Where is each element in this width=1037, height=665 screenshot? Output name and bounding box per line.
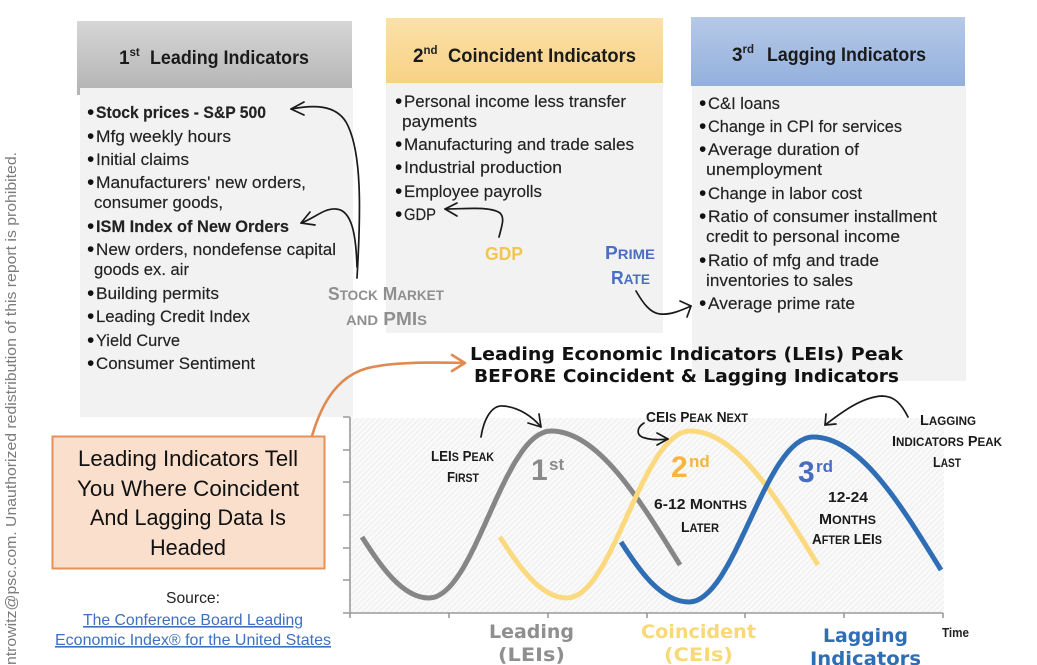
- arrow: stock market to S&P 500: [291, 102, 360, 278]
- list: lagging indicators: Change in labor cost: [708, 185, 862, 203]
- watermark: ntrowitz@psc.com. Unauthorized redistribution of this report is prohibited.: [4, 152, 20, 665]
- marker: 1st: 1: [531, 454, 548, 487]
- arrow: LEIs peak: [481, 406, 541, 437]
- chart title: [470, 345, 903, 387]
- list: lagging indicators: Average prime rate: [708, 295, 855, 313]
- list: leading indicators: Building permits: [96, 285, 219, 303]
- list: leading indicators: •: [87, 305, 94, 328]
- note: 6-12 months later: [654, 496, 747, 536]
- marker: 3rd: rd: [816, 457, 833, 476]
- list: leading indicators: New orders, nondefense capital: [96, 241, 336, 259]
- list: leading indicators: •: [87, 238, 94, 261]
- heading: lagging indicators: [691, 17, 965, 86]
- heading: lagging indicators: 3: [732, 45, 743, 66]
- note: LEIs peak first: FIRST: [447, 469, 480, 486]
- list: leading indicators: consumer goods,: [94, 194, 223, 212]
- marker: 1st: [531, 454, 564, 487]
- note: 6-12 months later: LATER: [681, 519, 719, 536]
- list: lagging indicators: [699, 92, 937, 315]
- chart title: Leading Economic Indicators (LEIs) Peak: [470, 345, 903, 365]
- list: lagging indicators: Ratio of mfg and trade: [708, 252, 879, 270]
- arrow: CEIs peak: [638, 423, 668, 445]
- list: coincident indicators: GDP: [404, 206, 436, 224]
- heading: coincident indicators: nd: [424, 45, 438, 57]
- callout: Leading Indicators Tell: [78, 446, 298, 471]
- marker: 3rd: 3: [798, 456, 815, 489]
- note: lagging indicators peak last: INDICATORS PEAK: [892, 433, 1002, 450]
- list: coincident indicators: payments: [402, 113, 477, 131]
- note: LEIs peak first: LEIS PEAK: [431, 448, 494, 465]
- axis label: coincident: [641, 621, 756, 665]
- list: leading indicators: Manufacturers' new orders,: [96, 174, 306, 192]
- label: prime rate: [605, 243, 655, 288]
- axis label: time: Time: [942, 626, 969, 640]
- note: 12-24 months after LEIs: 12-24: [828, 489, 869, 506]
- axis label: coincident: Coincident: [641, 621, 756, 643]
- axis label: lagging: Lagging: [823, 625, 908, 647]
- panel: lagging indicators: [691, 17, 966, 381]
- source: [55, 590, 331, 649]
- label: GDP: GDP: [485, 244, 523, 264]
- label: prime rate: PRIME: [605, 243, 655, 263]
- note: lagging indicators peak last: LAGGING: [920, 412, 976, 429]
- list: lagging indicators: •: [699, 205, 706, 228]
- list: leading indicators: Consumer Sentiment: [96, 355, 255, 373]
- note: 12-24 months after LEIs: AFTER LEIS: [812, 531, 882, 548]
- heading: leading indicators: 1: [119, 48, 130, 69]
- list: lagging indicators: •: [699, 249, 706, 272]
- note: LEIs peak first: [431, 448, 494, 486]
- note: 6-12 months later: 6-12 MONTHS: [654, 496, 747, 513]
- arrow: prime rate to list: [636, 291, 691, 317]
- heading: coincident indicators: [386, 18, 663, 83]
- list: leading indicators: •: [87, 125, 94, 148]
- list: leading indicators: •: [87, 171, 94, 194]
- panel: coincident indicators: [386, 18, 663, 333]
- list: leading indicators: [87, 101, 336, 375]
- axes: [343, 417, 943, 618]
- note: lagging indicators peak last: LAST: [933, 454, 962, 471]
- callout: [52, 436, 324, 568]
- label: stock market and PMIs: STOCK MARKET: [328, 284, 444, 304]
- list: leading indicators: •: [87, 215, 94, 238]
- list: lagging indicators: C&I loans: [708, 95, 780, 113]
- curve: coincident: [500, 431, 818, 598]
- list: leading indicators: •: [87, 101, 94, 124]
- note: lagging indicators peak last: [892, 412, 1002, 471]
- note: 12-24 months after LEIs: [812, 489, 882, 548]
- callout: Headed: [150, 535, 226, 560]
- list: leading indicators: Leading Credit Index: [96, 308, 251, 326]
- chart: indicator cycles: [343, 396, 1002, 665]
- heading: lagging indicators: Lagging Indicators: [767, 45, 926, 66]
- marker: 3rd: [798, 456, 833, 489]
- arrow: GDP to list: [445, 203, 503, 237]
- list: coincident indicators: •: [395, 90, 402, 113]
- marker: 2nd: [671, 451, 710, 484]
- chart title: BEFORE Coincident & Lagging Indicators: [474, 367, 899, 387]
- list: coincident indicators: Manufacturing and trade sales: [404, 136, 634, 154]
- heading: coincident indicators: 2: [413, 46, 424, 67]
- curve: lagging: [621, 437, 941, 602]
- source: Source:: [166, 590, 220, 607]
- marker: 2nd: 2: [671, 451, 688, 484]
- heading: coincident indicators: Coincident Indicators: [448, 46, 636, 67]
- arrow: lagging peak: [825, 396, 908, 425]
- heading: lagging indicators: rd: [742, 44, 754, 56]
- list: leading indicators: Initial claims: [96, 151, 189, 169]
- list: coincident indicators: Personal income less transfer: [404, 93, 627, 111]
- list: lagging indicators: unemployment: [706, 161, 822, 179]
- list: leading indicators: Mfg weekly hours: [96, 128, 231, 146]
- label: stock market and PMIs: AND PMIS: [346, 309, 427, 329]
- note: 12-24 months after LEIs: MONTHS: [819, 511, 876, 528]
- list: leading indicators: Yield Curve: [96, 332, 180, 350]
- heading: leading indicators: st: [130, 47, 140, 59]
- list: leading indicators: •: [87, 352, 94, 375]
- axis label: leading: Leading: [489, 621, 574, 643]
- list: lagging indicators: •: [699, 138, 706, 161]
- list: lagging indicators: •: [699, 92, 706, 115]
- list: lagging indicators: Ratio of consumer installment: [708, 208, 937, 226]
- callout: You Where Coincident: [77, 476, 300, 501]
- label: stock market and PMIs: [328, 284, 444, 329]
- panel: leading indicators: [77, 21, 353, 417]
- list: lagging indicators: Average duration of: [708, 141, 859, 159]
- list: lagging indicators: Change in CPI for services: [708, 118, 902, 136]
- list: lagging indicators: credit to personal income: [706, 228, 900, 246]
- list: coincident indicators: •: [395, 156, 402, 179]
- note: CEIs peak next: CEIS PEAK NEXT: [646, 409, 749, 426]
- list: coincident indicators: Industrial production: [404, 159, 562, 177]
- list: coincident indicators: Employee payrolls: [404, 183, 542, 201]
- callout: And Lagging Data Is: [90, 505, 286, 530]
- axis label: leading: [489, 621, 574, 665]
- marker: 1st: st: [549, 455, 564, 474]
- source: The Conference Board Leading: [83, 612, 303, 629]
- list: leading indicators: ISM Index of New Orders: [96, 218, 289, 236]
- marker: 2nd: nd: [689, 452, 710, 471]
- list: lagging indicators: inventories to sales: [706, 272, 853, 290]
- list: lagging indicators: •: [699, 115, 706, 138]
- heading: leading indicators: Leading Indicators: [150, 48, 309, 69]
- list: lagging indicators: •: [699, 292, 706, 315]
- list: coincident indicators: [395, 90, 634, 226]
- list: leading indicators: Stock prices - S&P 500: [96, 104, 266, 122]
- arrow: PMIs to ISM index: [301, 209, 357, 267]
- list: leading indicators: •: [87, 329, 94, 352]
- list: coincident indicators: •: [395, 133, 402, 156]
- heading: leading indicators: [77, 21, 352, 88]
- list: lagging indicators: •: [699, 182, 706, 205]
- list: coincident indicators: •: [395, 203, 402, 226]
- label: prime rate: RATE: [611, 268, 650, 288]
- source: Economic Index® for the United States: [55, 632, 331, 649]
- arrow: callout to chart title: [312, 355, 465, 436]
- list: leading indicators: •: [87, 282, 94, 305]
- curve: leading: [362, 431, 680, 598]
- list: coincident indicators: •: [395, 180, 402, 203]
- list: leading indicators: •: [87, 148, 94, 171]
- axis label: lagging: [810, 625, 921, 665]
- list: leading indicators: goods ex. air: [94, 261, 189, 279]
